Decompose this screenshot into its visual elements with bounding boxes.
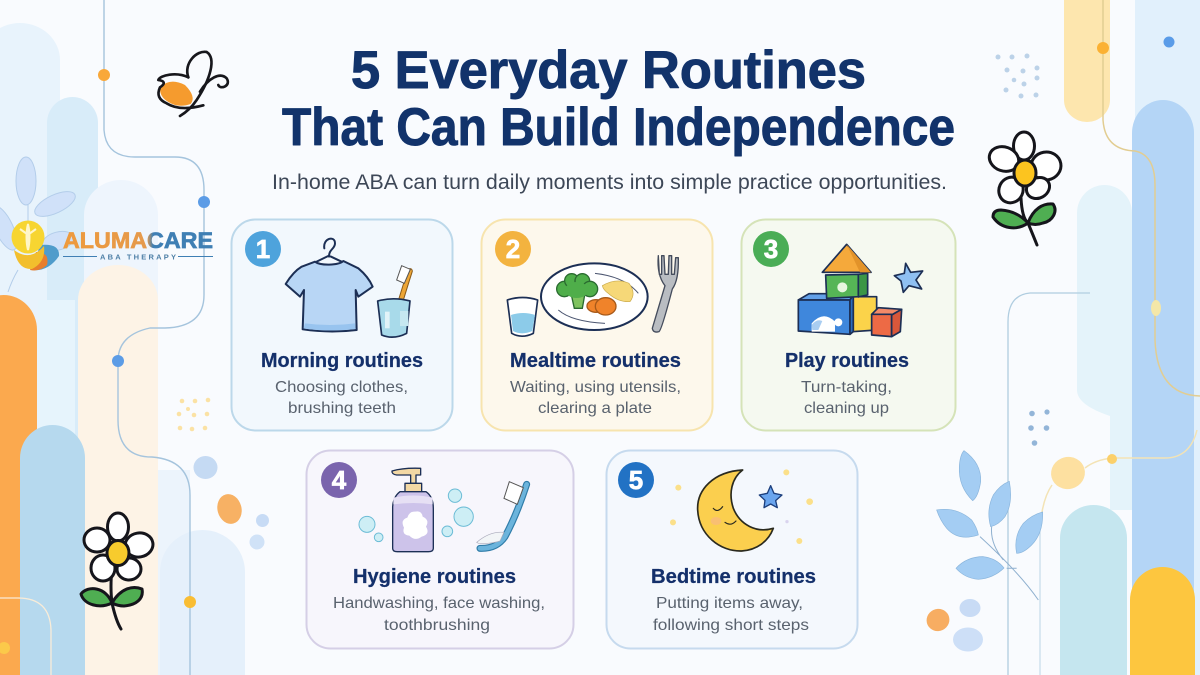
description: Waiting, using utensils, (510, 379, 681, 396)
description (653, 595, 809, 634)
badge 3 (753, 231, 789, 267)
description: brushing teeth (288, 400, 396, 417)
description: Choosing clothes, (275, 379, 408, 396)
badge 4 (321, 462, 357, 498)
title: That Can Build Independence (282, 98, 955, 157)
badge 2 (495, 231, 531, 267)
background: left dot cluster (177, 398, 210, 431)
left connector line with dots (98, 0, 210, 675)
subtitle: In-home ABA can turn daily moments into simple practice opportunities. (272, 171, 947, 194)
badge 4: 4 (332, 465, 347, 495)
left leaf sprig (0, 157, 79, 292)
panel: hygiene routines (306, 450, 574, 648)
heading: Play routines (785, 350, 909, 372)
description (510, 379, 681, 417)
logo emblem (12, 220, 59, 270)
badge 1 (245, 231, 281, 267)
title: 5 Everyday Routines (351, 41, 866, 100)
right bubbles (923, 599, 983, 652)
icon: soap bottle, bubbles and toothbrush (359, 468, 527, 552)
badge 1: 1 (256, 234, 270, 264)
right connector lines with dots (1008, 0, 1200, 675)
description: Handwashing, face washing, (333, 595, 545, 612)
panel: morning routines (232, 220, 452, 430)
badge 5: 5 (629, 465, 643, 495)
description: cleaning up (804, 400, 889, 417)
logo wordmark: ALUMACARE (63, 228, 213, 253)
left background shapes (0, 23, 245, 675)
badge 5 (618, 462, 654, 498)
icon: shirt and toothbrush cup (286, 239, 410, 337)
icon: sleeping moon and stars (670, 469, 813, 551)
icon: plate, glass and fork (507, 256, 678, 336)
icon: right leaf branch (937, 451, 1043, 600)
panel: bedtime routines (606, 450, 858, 648)
description: following short steps (653, 617, 809, 634)
badge 3: 3 (764, 234, 778, 264)
logo tagline: ABA THERAPY (100, 252, 176, 262)
icon: left flower (81, 513, 155, 629)
icon: right flower (986, 132, 1063, 245)
description: Putting items away, (656, 595, 803, 612)
left bubbles (194, 456, 269, 550)
right background shapes (1060, 0, 1200, 675)
description (275, 379, 408, 417)
heading: Mealtime routines (510, 350, 681, 372)
background: right dot clusters (996, 54, 1050, 446)
panel: mealtime routines (482, 220, 712, 430)
heading: Bedtime routines (651, 566, 816, 588)
heading: Morning routines (261, 350, 423, 372)
icon: butterfly (158, 52, 228, 116)
description: toothbrushing (384, 617, 490, 634)
description: Turn-taking, (801, 379, 892, 396)
panel: play routines (742, 220, 956, 430)
logo: AlumaCare (12, 220, 213, 270)
description: clearing a plate (538, 400, 652, 417)
badge 2: 2 (506, 234, 520, 264)
title (282, 41, 955, 157)
heading: Hygiene routines (353, 566, 516, 588)
description (333, 595, 545, 634)
icon: toy blocks and star (798, 244, 923, 337)
description (801, 379, 892, 417)
